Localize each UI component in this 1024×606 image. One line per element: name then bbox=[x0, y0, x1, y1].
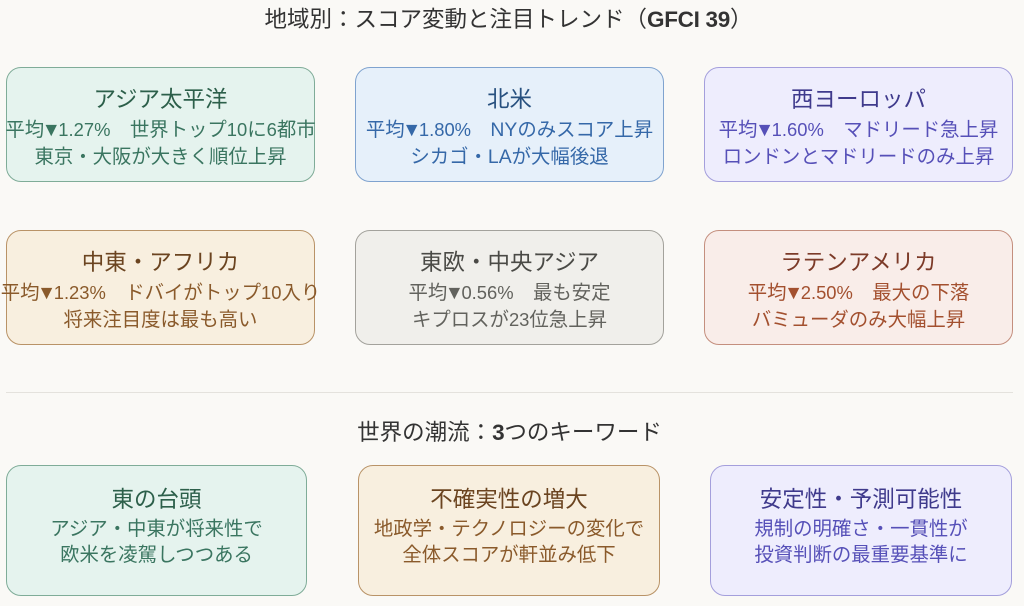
text: growing uncertainty line 1: 地政学・テクノロジーの変化で bbox=[374, 518, 644, 540]
heading: stability and predictability: 安定性・予測可能性 bbox=[760, 487, 962, 512]
text: growing uncertainty line 2: 全体スコアが軒並み低下 bbox=[402, 544, 616, 566]
text: Western Europe line 1: 平均▼1.60% マドリード急上昇 bbox=[719, 119, 998, 141]
panel: Middle East and Africa bbox=[6, 230, 315, 345]
heading: Eastern Europe and Central Asia: 東欧・中央アジア bbox=[420, 250, 599, 275]
text: Eastern Europe and Central Asia line 2: キプロスが23位急上昇 bbox=[412, 309, 607, 331]
panel: Asia Pacific bbox=[6, 67, 315, 182]
text: Middle East and Africa line 1: 平均▼1.23% ドバイがトップ10入り bbox=[1, 282, 320, 304]
panel: stability and predictability bbox=[710, 465, 1012, 596]
text: Eastern Europe and Central Asia line 1: 平均▼0.56% 最も安定 bbox=[408, 282, 611, 304]
heading: growing uncertainty: 不確実性の増大 bbox=[430, 487, 588, 512]
panel: rise of the East bbox=[6, 465, 307, 596]
text: Middle East and Africa line 2: 将来注目度は最も高い bbox=[64, 309, 257, 331]
panel: North America bbox=[355, 67, 664, 182]
heading: North America: 北米 bbox=[487, 87, 532, 112]
panel: Western Europe bbox=[704, 67, 1013, 182]
title: 地域別：スコア変動と注目トレンド（GFCI 39） bbox=[265, 7, 752, 32]
subheading: three keywords: 世界の潮流：3つのキーワード bbox=[357, 420, 662, 445]
heading: Western Europe: 西ヨーロッパ bbox=[791, 87, 926, 112]
heading: rise of the East: 東の台頭 bbox=[111, 487, 202, 512]
panel: growing uncertainty bbox=[358, 465, 660, 596]
text: stability and predictability line 1: 規制の明確さ・一貫性が bbox=[754, 518, 968, 540]
panel: Latin America bbox=[704, 230, 1013, 345]
text: rise of the East line 1: アジア・中東が将来性で bbox=[50, 518, 263, 540]
text: North America line 1: 平均▼1.80% NYのみスコア上昇 bbox=[366, 119, 653, 141]
text: stability and predictability line 2: 投資判断の最重要基準に bbox=[754, 544, 968, 566]
text: rise of the East line 2: 欧米を凌駕しつつある bbox=[60, 544, 253, 566]
heading: Asia Pacific: アジア太平洋 bbox=[93, 87, 228, 112]
text: Latin America line 2: バミューダのみ大幅上昇 bbox=[752, 309, 965, 331]
text: Latin America line 1: 平均▼2.50% 最大の下落 bbox=[748, 282, 969, 304]
heading: Middle East and Africa: 中東・アフリカ bbox=[82, 250, 239, 275]
text: Asia Pacific line 2: 東京・大阪が大きく順位上昇 bbox=[34, 146, 287, 168]
text: Asia Pacific line 1: 平均▼1.27% 世界トップ10に6都市 bbox=[5, 119, 316, 141]
panel: Eastern Europe and Central Asia bbox=[355, 230, 664, 345]
text: Western Europe line 2: ロンドンとマドリードのみ上昇 bbox=[723, 146, 994, 168]
text: North America line 2: シカゴ・LAが大幅後退 bbox=[410, 146, 609, 168]
heading: Latin America: ラテンアメリカ bbox=[780, 250, 937, 275]
